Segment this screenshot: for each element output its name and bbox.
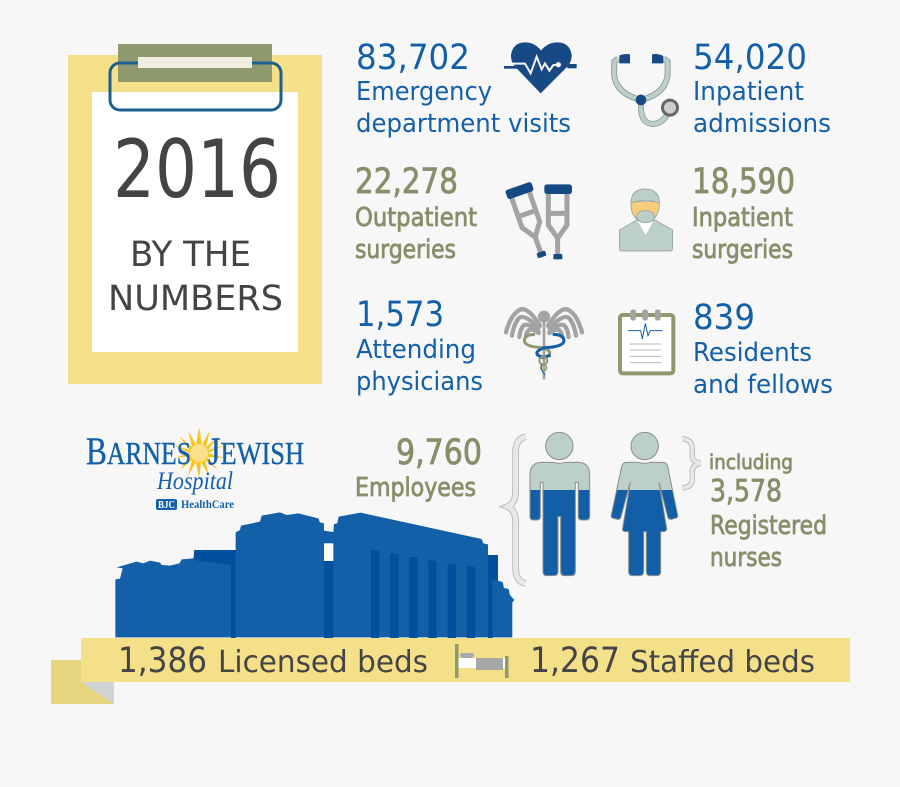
stat: employees: Employees bbox=[355, 473, 476, 503]
icon: heart with pulse bbox=[504, 42, 577, 93]
icon: large brace bbox=[507, 437, 526, 584]
stat: attending physicians: Attending bbox=[356, 335, 476, 365]
stat: inpatient admissions: admissions bbox=[693, 109, 831, 139]
logo: Barnes-Jewish Hospital: BARNES bbox=[86, 430, 191, 473]
icon: medical chart notepad bbox=[620, 309, 673, 373]
logo: Barnes-Jewish Hospital: HealthCare bbox=[181, 497, 235, 511]
staffed beds bbox=[530, 641, 815, 681]
icon: surgeon bbox=[619, 189, 673, 251]
stat: residents and fellows bbox=[693, 298, 833, 400]
logo: Barnes-Jewish Hospital: Hospital bbox=[156, 468, 233, 495]
clipboard board bbox=[68, 55, 322, 384]
stat: attending physicians bbox=[356, 295, 483, 397]
stat: inpatient surgeries: surgeries bbox=[692, 235, 793, 265]
icon: woman figure bbox=[611, 432, 678, 576]
clipboard paper bbox=[92, 92, 298, 352]
icon: small brace bbox=[682, 439, 700, 488]
logo sun bbox=[173, 427, 225, 479]
stat: inpatient surgeries: Inpatient bbox=[692, 203, 793, 233]
stat: attending physicians: 1,573 bbox=[356, 295, 444, 335]
icon: man figure bbox=[530, 432, 590, 576]
ribbon fold bbox=[51, 660, 114, 704]
stat: residents and fellows: Residents bbox=[693, 338, 812, 368]
icon: crutches bbox=[505, 181, 572, 261]
stat: registered nurses bbox=[709, 450, 827, 573]
stat: emergency department visits bbox=[356, 38, 571, 139]
stat: emergency department visits: department visits bbox=[356, 109, 571, 139]
licensed beds: 1,386 bbox=[118, 641, 207, 681]
stat: inpatient surgeries: 18,590 bbox=[692, 162, 795, 202]
logo: Barnes-Jewish Hospital: JEWISH bbox=[208, 430, 304, 473]
icon: stethoscope bbox=[614, 54, 679, 124]
stat: registered nurses: nurses bbox=[710, 543, 782, 573]
stat: emergency department visits: 83,702 bbox=[356, 38, 470, 78]
licensed beds bbox=[118, 641, 428, 681]
stat: registered nurses: including bbox=[709, 450, 793, 474]
staffed beds: 1,267 bbox=[530, 641, 620, 681]
stat: employees bbox=[355, 433, 482, 503]
icon: caduceus bbox=[506, 309, 582, 379]
logo: Barnes-Jewish Hospital bbox=[86, 427, 304, 511]
clipboard clip bbox=[110, 44, 281, 110]
subtitle: by the numbers: NUMBERS bbox=[108, 279, 283, 319]
stat: outpatient surgeries: Outpatient bbox=[355, 203, 477, 233]
stat: emergency department visits: Emergency bbox=[356, 77, 492, 107]
title: 2016: 2016 bbox=[113, 123, 281, 216]
ribbon banner bbox=[51, 638, 850, 704]
stat: outpatient surgeries bbox=[355, 162, 477, 265]
stat: registered nurses: 3,578 bbox=[710, 474, 782, 509]
hospital building silhouette bbox=[115, 512, 514, 638]
stat: inpatient admissions: Inpatient bbox=[693, 77, 804, 107]
licensed beds: Licensed beds bbox=[218, 645, 428, 680]
stat: outpatient surgeries: surgeries bbox=[355, 235, 456, 265]
panel: clipboard bbox=[68, 44, 322, 384]
stat: inpatient admissions: 54,020 bbox=[693, 38, 807, 78]
stat: inpatient admissions bbox=[693, 38, 831, 139]
stat: residents and fellows: and fellows bbox=[693, 370, 833, 400]
stat: inpatient surgeries bbox=[692, 162, 795, 265]
ribbon band bbox=[81, 638, 850, 682]
stat: attending physicians: physicians bbox=[356, 367, 483, 397]
staffed beds: Staffed beds bbox=[630, 645, 815, 680]
stat: residents and fellows: 839 bbox=[693, 298, 755, 338]
subtitle: by the numbers: BY THE bbox=[130, 235, 251, 275]
stat: employees: 9,760 bbox=[396, 433, 482, 473]
stat: registered nurses: Registered bbox=[710, 511, 827, 541]
stat: outpatient surgeries: 22,278 bbox=[355, 162, 458, 202]
icon: bed bbox=[455, 644, 508, 678]
subtitle: by the numbers bbox=[108, 235, 283, 319]
logo: Barnes-Jewish Hospital: BJC bbox=[158, 500, 175, 511]
